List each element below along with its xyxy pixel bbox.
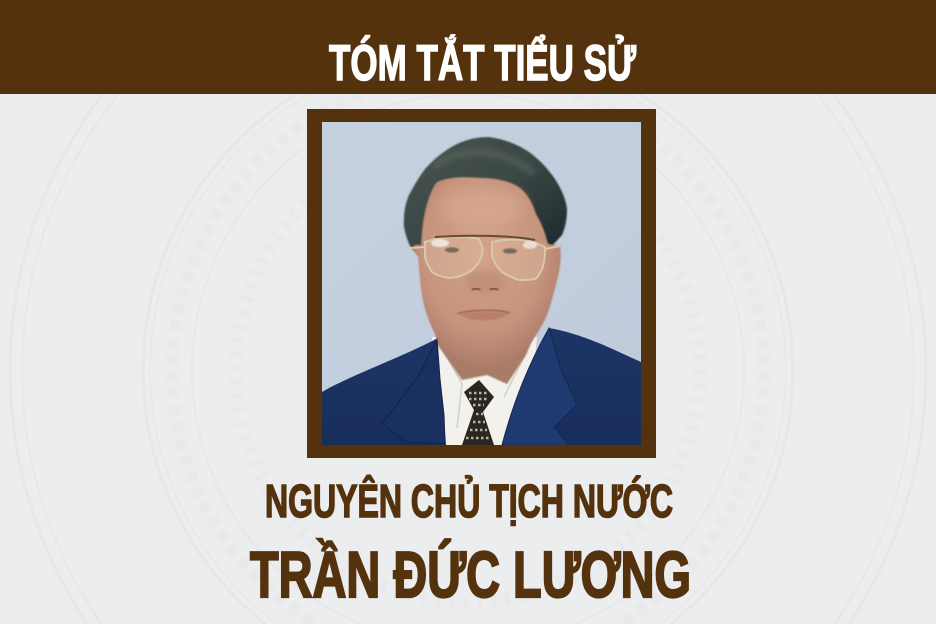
neck xyxy=(435,334,534,385)
portrait frame xyxy=(307,109,656,458)
subtitle: NGUYÊN CHỦ TỊCH NƯỚC xyxy=(265,475,673,527)
eyes xyxy=(445,247,459,253)
header band xyxy=(0,0,936,94)
face xyxy=(412,177,561,372)
glasses xyxy=(410,237,560,280)
lapels xyxy=(382,339,445,444)
title: TÓM TẮT TIỂU SỬ xyxy=(329,34,636,91)
suit jacket xyxy=(322,339,446,445)
hair xyxy=(404,137,567,256)
forehead sheen xyxy=(446,192,518,218)
nose and mouth shading xyxy=(466,270,504,293)
shirt xyxy=(432,337,537,445)
tie xyxy=(462,380,494,445)
portrait photo xyxy=(322,122,641,445)
name: TRẦN ĐỨC LƯƠNG xyxy=(250,538,691,611)
